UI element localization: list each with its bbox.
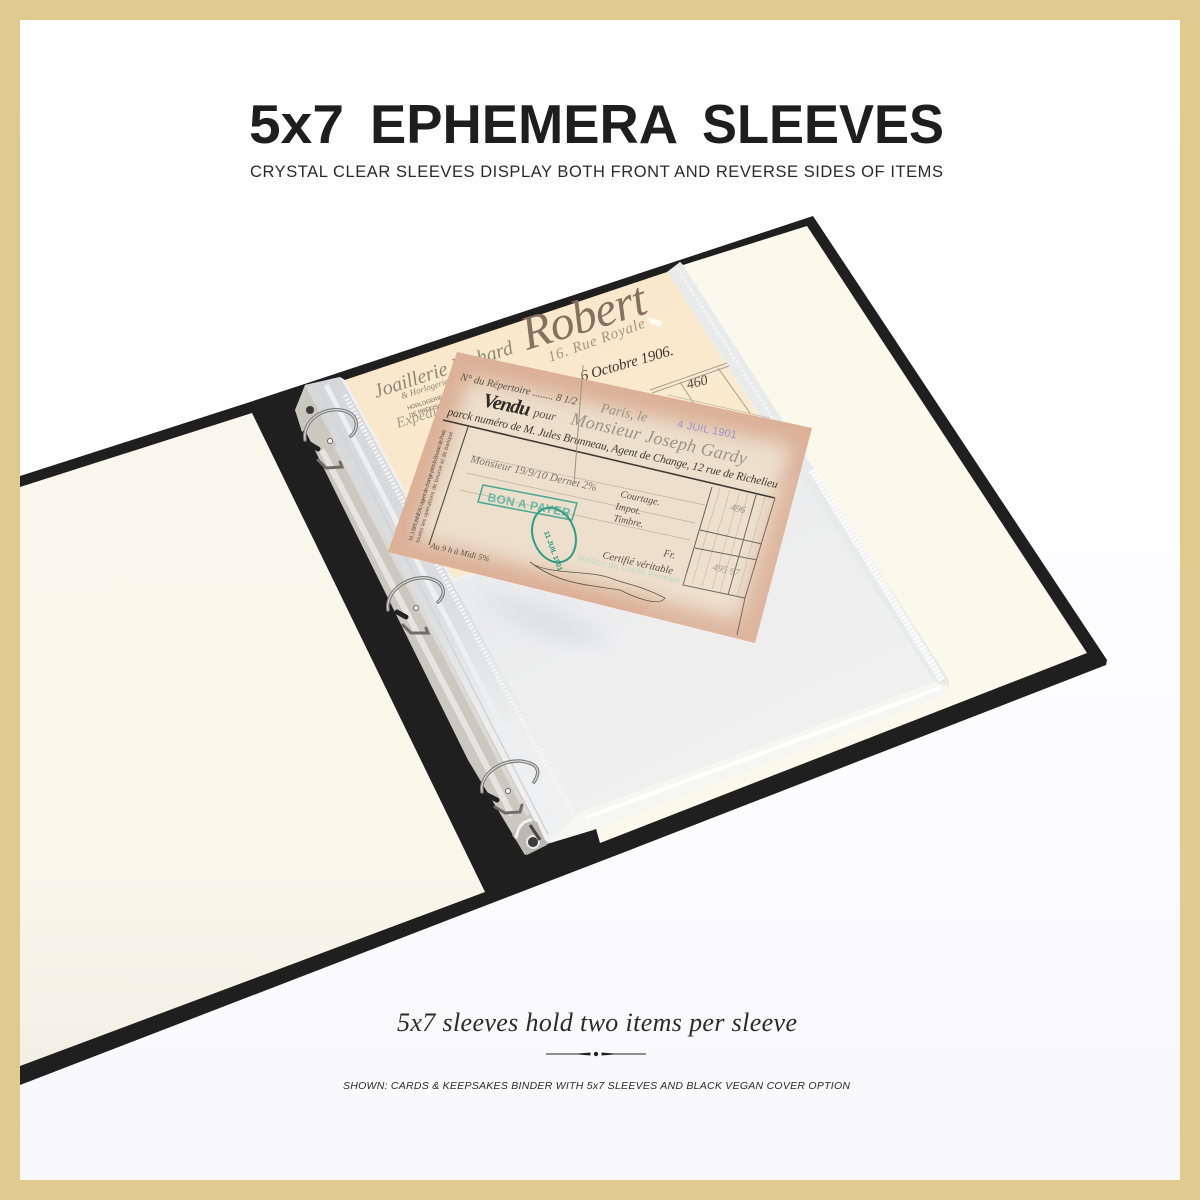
front card: Vendu receipt	[388, 352, 812, 643]
card header text: Paris, le	[598, 401, 649, 426]
Robert heading: Robert	[514, 272, 654, 361]
footnote: SHOWN: CARDS & KEEPSAKES BINDER WITH 5x7 SLEEVES AND BLACK VEGAN COVER OPTION	[343, 1080, 850, 1092]
card header text: pour	[531, 405, 558, 424]
card header text: parck numéro de M. Jules Brunneau, Agent de Change, 12 rue de Richelieu	[445, 406, 779, 491]
ring bar end cap	[512, 818, 547, 855]
back card: Robert invoice: Expéditions	[393, 395, 467, 432]
card side text: toutes les opérations de bourse et de banque	[415, 431, 455, 544]
green oval stamp: 11 JUIL 1901	[542, 530, 563, 572]
card header text: N° du Répertoire ........ 8 1/2	[458, 372, 579, 408]
receipt table	[683, 487, 775, 635]
back card: Robert invoice: DE PRÉCISION	[408, 400, 448, 419]
sleeve lower pocket	[445, 468, 935, 813]
ring top	[295, 403, 356, 468]
back card: Robert invoice: HORLOGERIE	[407, 395, 444, 412]
card body text: Courtage.	[619, 489, 661, 508]
card body text: Fr.	[661, 548, 676, 562]
subtitle: CRYSTAL CLEAR SLEEVES DISPLAY BOTH FRONT AND REVERSE SIDES OF ITEMS	[250, 163, 943, 181]
signature	[530, 562, 665, 602]
card rules	[443, 420, 775, 498]
card header text: 4 JUIL 1901	[676, 418, 738, 441]
binder rings	[295, 403, 538, 813]
caption italic: 5x7 sleeves hold two items per sleeve	[397, 1008, 797, 1037]
card glare	[640, 470, 800, 643]
binder photo	[20, 216, 1107, 1085]
title	[249, 93, 944, 155]
card body text: Certifié véritable	[601, 550, 674, 577]
ring metal bar	[295, 385, 550, 855]
ring bottom	[482, 761, 538, 813]
title: EPHEMERA	[370, 93, 678, 155]
sleeve right band	[667, 262, 949, 687]
sleeve left band	[305, 377, 593, 843]
ring middle	[388, 578, 443, 633]
back card: Robert invoice	[345, 272, 772, 578]
pocket wave shading	[475, 590, 610, 643]
card body text: Au 9 h à Midi 5%	[429, 540, 490, 563]
green stamp: bon a payer: BON A PAYER	[486, 490, 572, 520]
ornament divider	[546, 1052, 646, 1056]
back card: Robert invoice: 16. Rue Royale	[546, 316, 648, 366]
card header text: Monsieur Joseph Gardy	[568, 408, 749, 468]
card header text: Vendu	[481, 389, 532, 421]
card body text: Maison de Crédit Parisien	[577, 552, 681, 586]
clear sleeve	[305, 262, 949, 843]
table figures: 496	[729, 502, 746, 516]
card body text	[429, 453, 681, 586]
card body text: Monsieur 19/9/10 Dernet 2%	[468, 453, 598, 494]
black cover and spine	[20, 216, 1107, 1085]
back card: Robert invoice: 460	[685, 373, 709, 393]
left cream page	[20, 413, 485, 1066]
card body text: Timbre.	[612, 513, 644, 530]
card side text: M. J. BRUNNEAU agent de change près la Bourse de Paris	[408, 429, 448, 542]
sleeve bottom band	[550, 682, 949, 843]
table figures	[711, 502, 746, 579]
back card: Robert invoice: & Horlogerie	[400, 376, 449, 401]
green oval stamp	[525, 502, 583, 572]
card body text: Impot.	[613, 501, 642, 517]
back card: Robert invoice: 6 Octobre 1906.	[579, 343, 675, 385]
right cream page	[560, 226, 1087, 843]
back card: Robert invoice: Joaillerie Richard	[371, 337, 517, 403]
table figures: 495 97	[711, 562, 742, 579]
title: SLEEVES	[702, 93, 944, 155]
title: 5x7	[249, 93, 344, 155]
